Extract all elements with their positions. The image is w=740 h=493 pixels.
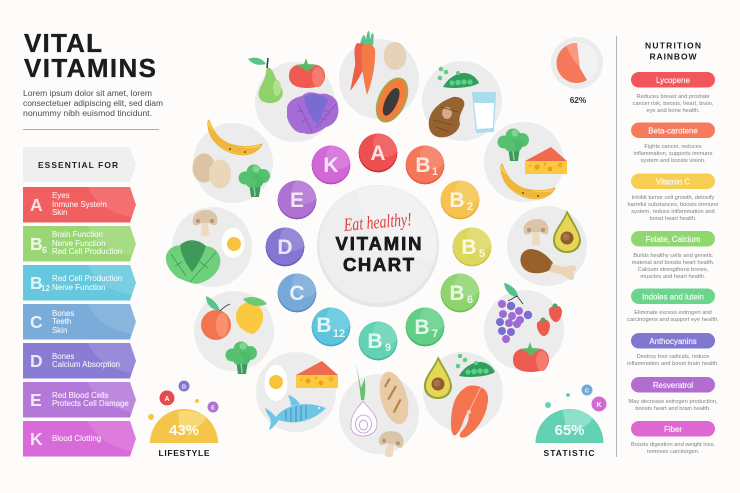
vitamin ball B5: B bbox=[461, 236, 477, 259]
vitamin ball B6 bbox=[440, 271, 481, 312]
small balls: A bbox=[164, 396, 170, 403]
icon: meat bbox=[429, 97, 464, 137]
vitamin ball B5: 5 bbox=[479, 248, 485, 260]
row: vitamin B12: B bbox=[30, 273, 43, 293]
row: vitamin A: Skin bbox=[52, 208, 67, 217]
intro text: Lorem ipsum dolor sit amet, lorem bbox=[23, 88, 152, 98]
food circle: avocado, peas, salmon bbox=[423, 352, 503, 438]
row: vitamin B12 bbox=[23, 265, 136, 300]
icon: purple cabbage bbox=[287, 92, 338, 134]
icon: fried egg bbox=[222, 228, 244, 258]
chart title: CHART bbox=[343, 254, 415, 275]
vitamin ball B5 bbox=[452, 225, 493, 266]
dome bbox=[150, 409, 218, 443]
vitamin ball B7 bbox=[406, 305, 446, 346]
stat: lifestyle 43% bbox=[148, 380, 218, 458]
nutrient: anthocyanins: inflammation and boost brain health. bbox=[627, 361, 719, 367]
nutrient: resveratrol: May decrease estrogen production, bbox=[628, 399, 718, 405]
icon: papaya bbox=[369, 72, 415, 128]
row: vitamin A: Inmune System bbox=[52, 200, 107, 209]
nutrient: lycopene: Reduces breast and prostate bbox=[636, 94, 710, 100]
nutrient: folate, calcium: muscles and heart health. bbox=[640, 274, 706, 280]
small balls bbox=[545, 384, 606, 412]
vitamin ball B1: B bbox=[415, 154, 431, 177]
center circle bbox=[317, 185, 439, 307]
heading: nutrition rainbow bbox=[645, 40, 701, 62]
row: vitamin D: Bones bbox=[52, 352, 74, 361]
row: vitamin C: Skin bbox=[52, 326, 67, 335]
vitamin ball E: E bbox=[290, 189, 304, 212]
vitamin ball E bbox=[278, 178, 318, 220]
row: vitamin K: Blood Clotting bbox=[52, 434, 101, 443]
icon: grapes bbox=[496, 283, 532, 343]
row: vitamin E: E bbox=[30, 390, 42, 410]
nutrient: fiber bbox=[631, 421, 715, 455]
intro text bbox=[23, 88, 163, 118]
heading: nutrition rainbow: NUTRITION bbox=[645, 40, 701, 50]
vitamin ball B9: B bbox=[367, 330, 383, 353]
stat: statistic 65% bbox=[536, 384, 606, 458]
small balls: D bbox=[182, 384, 186, 390]
nutrient: vitamin C: Vitamin C bbox=[656, 177, 690, 186]
nutrient: vitamin C: Inhibit tumor cell growth, detoxify bbox=[632, 195, 715, 201]
nutrient: fiber: removes carcinogen. bbox=[647, 449, 700, 455]
icon: chicken leg bbox=[520, 249, 576, 280]
nutrient: resveratrol: boosts heart and brain health. bbox=[635, 406, 711, 412]
vitamin ball B1: 1 bbox=[432, 166, 438, 178]
intro text: nonummy nibh euismod tincidunt. bbox=[23, 108, 152, 118]
nutrient: folate, calcium bbox=[631, 231, 715, 280]
nutrient: beta-carotene bbox=[631, 122, 715, 164]
nutrient: resveratrol: Resveratrol bbox=[653, 381, 693, 390]
stat: statistic 65%: STATISTIC bbox=[544, 448, 594, 458]
food circle: egg, cheese, fish bbox=[256, 352, 338, 432]
nutrient: vitamin C: system, reduce inflammation and bbox=[631, 209, 715, 215]
vitamin ball A bbox=[358, 131, 399, 172]
vitamin ball B9 bbox=[358, 319, 399, 360]
stat: statistic 65%: 65% bbox=[554, 422, 585, 439]
row: vitamin B6: Brain Function bbox=[52, 230, 103, 239]
vitamin ball B12: B bbox=[316, 314, 332, 337]
small balls: K bbox=[596, 402, 602, 409]
row: vitamin A: A bbox=[30, 195, 43, 215]
row: vitamin B6: Nerve Function bbox=[52, 239, 106, 248]
vitamin ball B1 bbox=[406, 143, 446, 184]
row: vitamin B12: Nerve Function bbox=[52, 283, 106, 292]
icon: milk glass bbox=[472, 92, 496, 133]
row: vitamin K bbox=[23, 421, 136, 456]
food circle: banana, eggs, broccoli bbox=[192, 120, 273, 203]
icon: carrots bbox=[350, 31, 375, 95]
row: vitamin D: Calcium Absorption bbox=[52, 360, 120, 369]
vitamin ball K bbox=[312, 143, 352, 184]
food circle: broccoli, cheese, banana bbox=[484, 122, 567, 202]
small balls: C bbox=[585, 388, 589, 394]
nutrient: lycopene: eye and bone health. bbox=[646, 108, 700, 114]
nutrient: resveratrol bbox=[628, 377, 718, 412]
vitamin ball B7: B bbox=[414, 316, 430, 339]
row: vitamin D bbox=[23, 343, 136, 378]
row: vitamin E bbox=[23, 382, 136, 418]
nutrient: beta-carotene: system and boosts vision. bbox=[640, 158, 706, 164]
icon: lemon bbox=[236, 297, 267, 334]
vitamin ball C: C bbox=[289, 282, 305, 305]
icon: bread bbox=[374, 369, 414, 427]
food circle: carrots, egg, papaya bbox=[339, 31, 419, 128]
stat: lifestyle 43%: LIFESTYLE bbox=[158, 448, 210, 458]
icon: fried egg bbox=[264, 365, 288, 401]
food circle: apple, lemon, broccoli bbox=[194, 291, 274, 374]
row: vitamin B6 bbox=[23, 226, 136, 262]
food circle: mushroom, egg, lettuce bbox=[166, 207, 252, 287]
icon: strawberries bbox=[537, 304, 562, 336]
nutrient: beta-carotene: Fights cancer, reduces bbox=[644, 144, 702, 150]
vitamin ball K: K bbox=[323, 154, 339, 177]
food circle: pear, tomato, cabbage bbox=[248, 58, 338, 142]
vitamin ball A: A bbox=[370, 142, 386, 165]
vitamin ball B2: B bbox=[449, 189, 465, 212]
nutrient: indoles and lutein: Eliminate excess estrogen and bbox=[634, 310, 712, 316]
vitamin ball D bbox=[266, 225, 306, 266]
vitamin ball B2: 2 bbox=[467, 201, 473, 213]
icon: salmon bbox=[451, 386, 488, 438]
nutrient: folate, calcium: Folate, Calcium bbox=[646, 235, 701, 244]
nutrient: anthocyanins bbox=[627, 333, 719, 367]
row: vitamin C: Bones bbox=[52, 309, 74, 318]
vitamin ball B12 bbox=[312, 305, 352, 346]
intro text: consectetuer adipiscing elit, sed diam bbox=[23, 98, 163, 108]
row: vitamin E: Protects Cell Damage bbox=[52, 399, 129, 408]
nutrient: indoles and lutein: Indoles and lutein bbox=[642, 292, 704, 301]
row: vitamin B12: 12 bbox=[41, 284, 50, 293]
slogan: Eat healthy! bbox=[342, 210, 413, 236]
nutrient: folate, calcium: Builds healthy cells and genetic bbox=[633, 253, 713, 259]
vitamin ball C bbox=[278, 271, 318, 312]
small balls bbox=[148, 380, 218, 420]
chart title bbox=[336, 233, 422, 275]
vitamin ball B7: 7 bbox=[432, 328, 438, 340]
nutrient: lycopene: Lycopene bbox=[656, 76, 691, 85]
icon: lettuce bbox=[166, 240, 220, 284]
vitamin ball B9: 9 bbox=[385, 342, 391, 354]
title: VITAL bbox=[24, 28, 102, 58]
row: vitamin A: Eyes bbox=[52, 191, 70, 200]
icon: fish bbox=[265, 395, 326, 430]
food circle: grapes, strawberries, tomato bbox=[484, 283, 564, 372]
row: vitamin K: K bbox=[30, 429, 43, 449]
icon: eggs bbox=[192, 154, 231, 188]
row: vitamin C bbox=[23, 304, 136, 340]
nutrient: indoles and lutein bbox=[627, 288, 719, 323]
dome bbox=[536, 409, 604, 443]
vitamin ball B6: B bbox=[449, 282, 465, 305]
row: vitamin B6: Red Cell Production bbox=[52, 247, 122, 256]
nutrient: anthocyanins: Destroy free radicals, reduce bbox=[637, 354, 709, 360]
food circle: peas, meat, milk bbox=[422, 61, 502, 141]
icon: onion bbox=[351, 363, 377, 436]
nutrient: lycopene bbox=[631, 72, 715, 114]
nutrient: beta-carotene: Beta-carotene bbox=[648, 126, 698, 135]
stat: lifestyle 43%: 43% bbox=[169, 422, 199, 439]
icon: pear bbox=[248, 58, 283, 103]
vitamin ball D: D bbox=[277, 236, 293, 259]
nutrient: vitamin C: harmful substances, boosts immune bbox=[627, 202, 719, 208]
vitamin ball B12: 12 bbox=[333, 328, 345, 340]
row: vitamin D: D bbox=[30, 351, 43, 371]
chart title: VITAMIN bbox=[336, 233, 422, 254]
title: VITAMINS bbox=[24, 53, 156, 83]
row: vitamin A bbox=[23, 187, 136, 222]
row: vitamin B6: 6 bbox=[42, 245, 47, 255]
vitamin ball B2 bbox=[440, 178, 481, 220]
nutrient: vitamin C bbox=[627, 174, 719, 222]
pie chart 62%: 62% bbox=[570, 95, 587, 105]
nutrient: fiber: Boosts digestion and weight loss, bbox=[631, 442, 715, 448]
icon: apple bbox=[201, 296, 231, 340]
row: vitamin E: Red Blood Cells bbox=[52, 391, 109, 400]
nutrient: fiber: Fiber bbox=[664, 425, 682, 434]
pie chart 62% bbox=[551, 37, 603, 105]
heading: nutrition rainbow: RAINBOW bbox=[650, 52, 697, 62]
nutrient: anthocyanins: Anthocyanins bbox=[649, 337, 697, 346]
small balls: E bbox=[211, 406, 215, 412]
essential for header bbox=[23, 147, 136, 182]
row: vitamin B12: Red Cell Production bbox=[52, 274, 122, 283]
nutrient: folate, calcium: material and boosts heart health. bbox=[632, 260, 715, 266]
row: vitamin B6: B bbox=[30, 234, 43, 254]
food circle: onion, bread, mushroom bbox=[339, 363, 419, 459]
row: vitamin C: Teeth bbox=[52, 317, 71, 326]
icon: egg bbox=[384, 42, 406, 70]
nutrient: lycopene: cancer risk; boosts, heart, brain, bbox=[633, 101, 714, 107]
row: vitamin C: C bbox=[30, 312, 43, 332]
title bbox=[24, 28, 156, 83]
food circle: mushroom, avocado, chicken bbox=[507, 206, 587, 286]
nutrient: indoles and lutein: carcinogens and support eye health. bbox=[627, 317, 719, 323]
nutrient: vitamin C: boost heart health. bbox=[649, 216, 697, 222]
nutrient: folate, calcium: Calcium strengthens bones, bbox=[638, 267, 709, 273]
nutrient: beta-carotene: inflammation, supports immune bbox=[633, 151, 713, 157]
vitamin ball B6: 6 bbox=[467, 294, 473, 306]
essential for header: ESSENTIAL FOR bbox=[38, 160, 118, 170]
